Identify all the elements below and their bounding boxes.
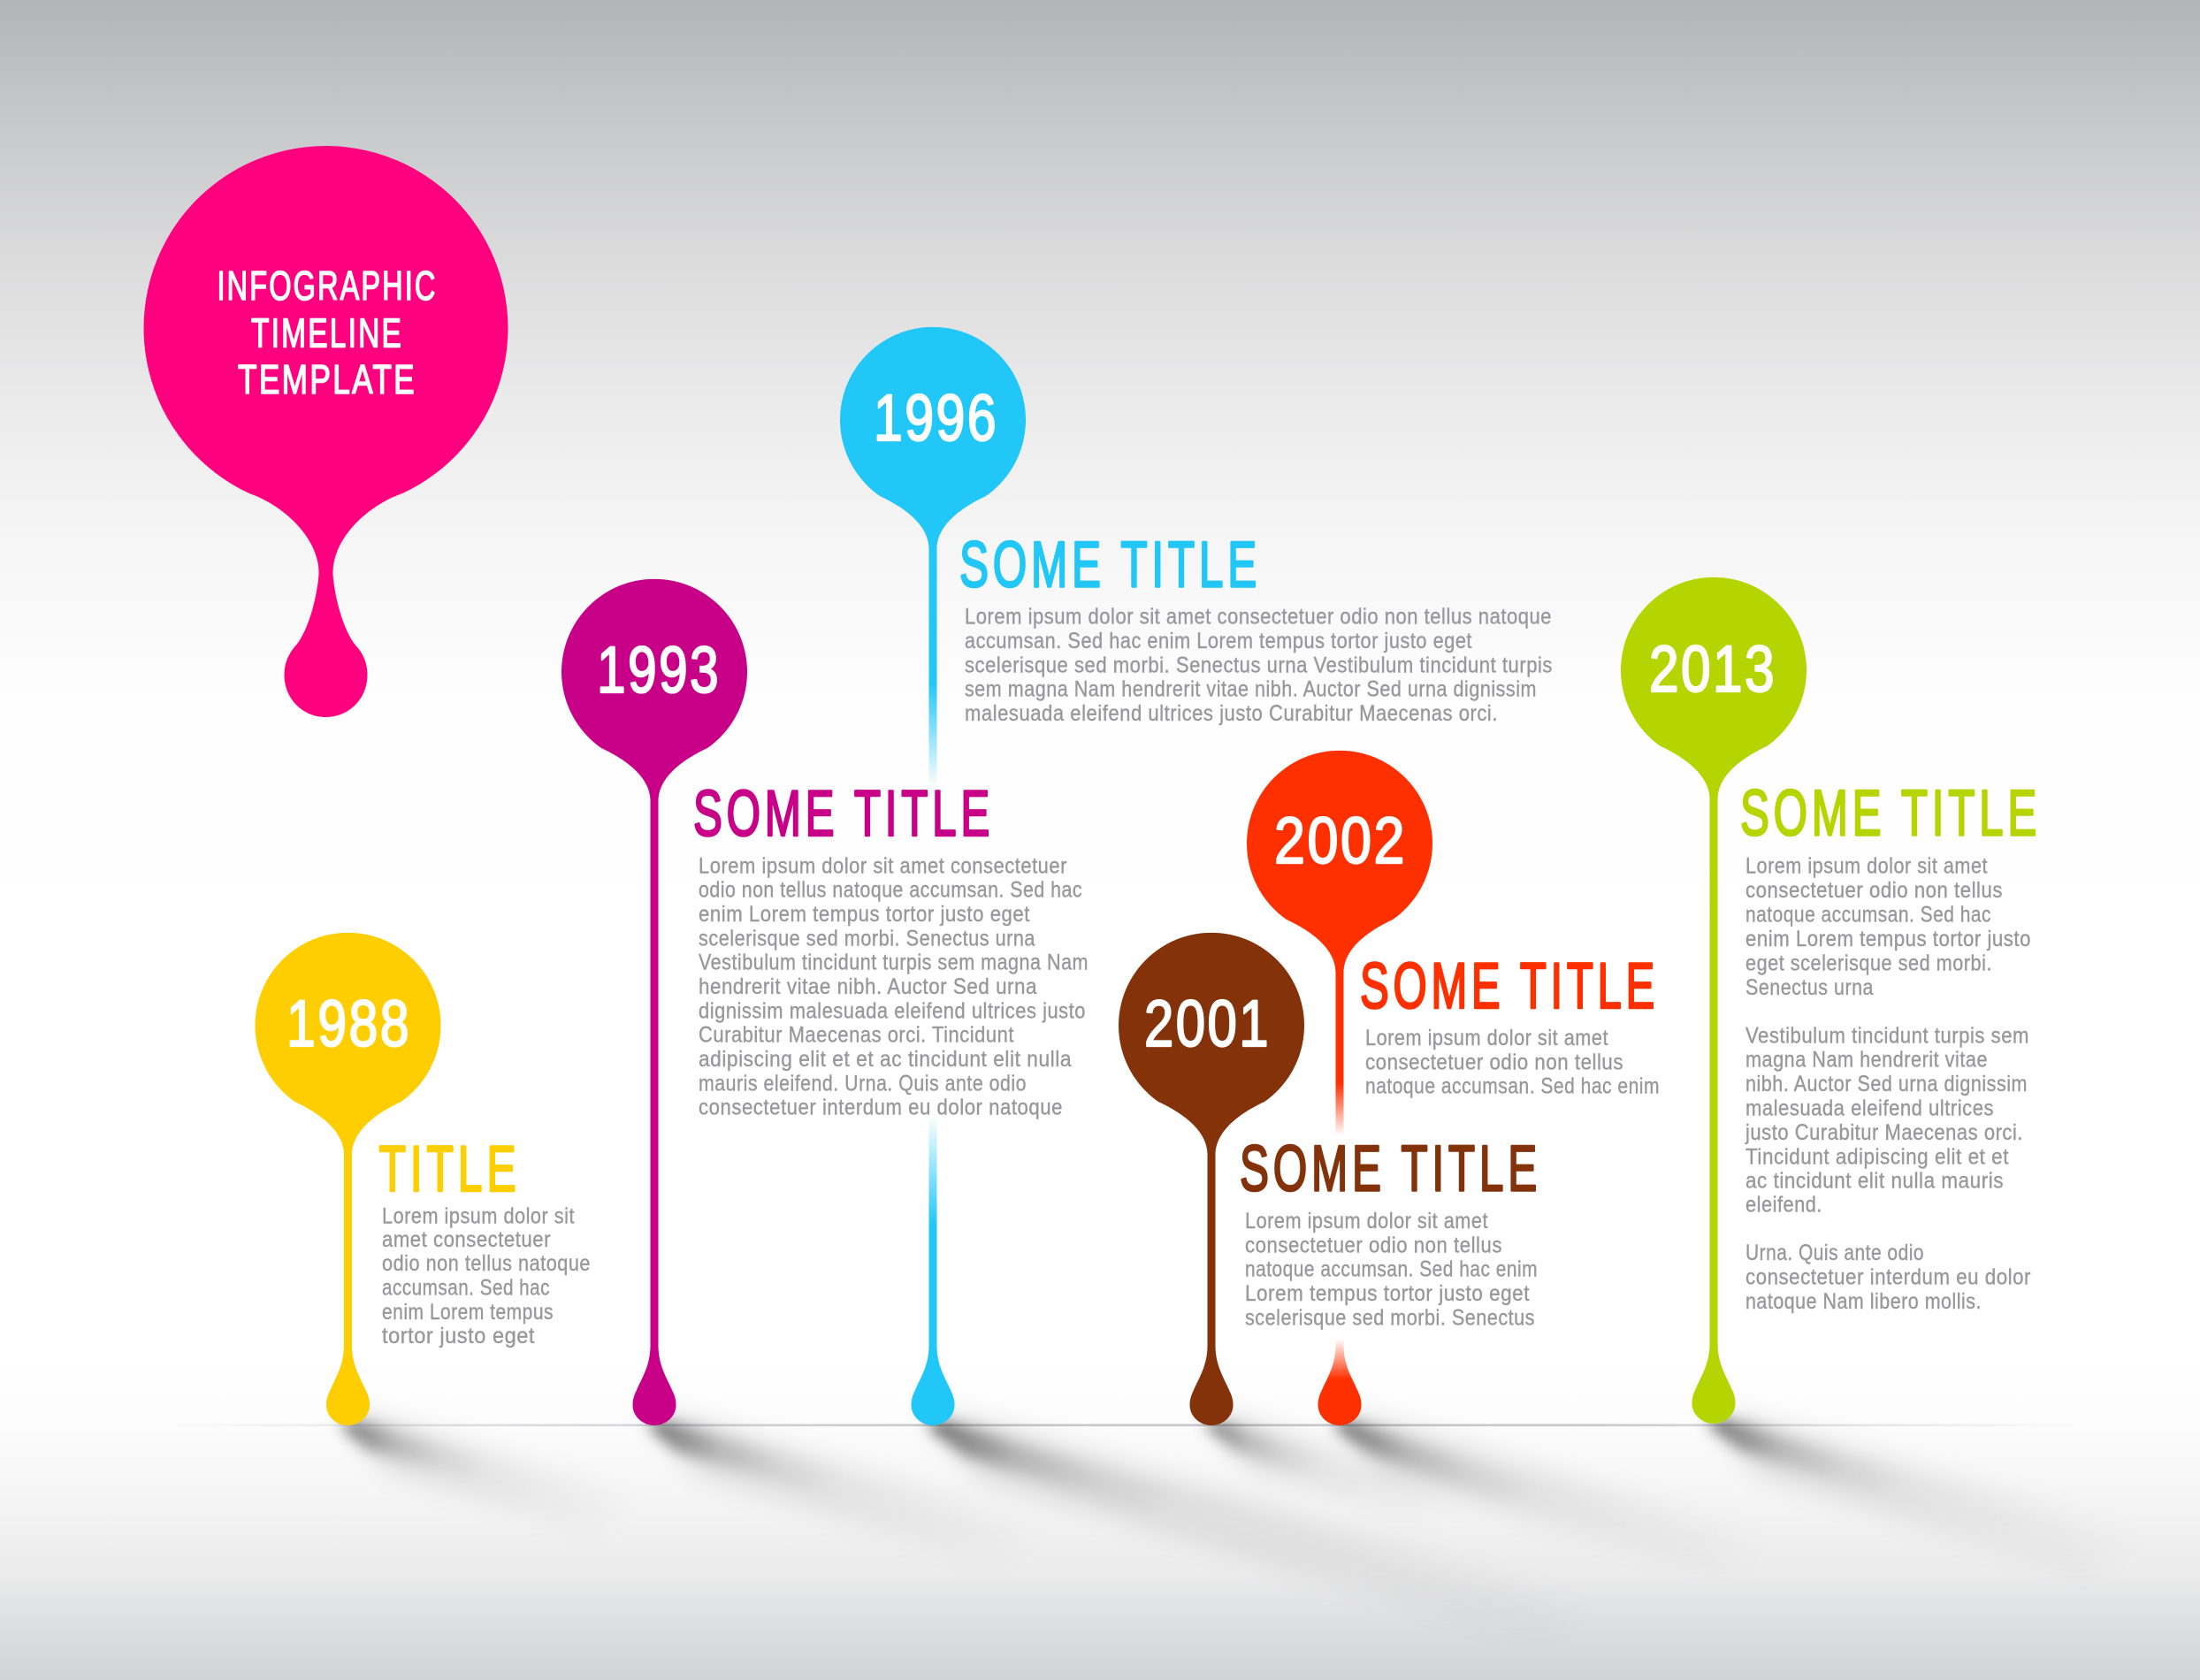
body text: eget scelerisque sed morbi. bbox=[1745, 951, 1992, 976]
body text: Lorem ipsum dolor sit amet consectetuer odio non tellus natoque bbox=[965, 605, 1552, 630]
year: 2002 bbox=[1274, 804, 1407, 877]
shadow: sharp near layer bbox=[340, 1418, 1914, 1510]
body text: enim Lorem tempus tortor justo bbox=[1745, 927, 2031, 951]
pin bbox=[561, 579, 747, 1425]
body text bbox=[1245, 1209, 1538, 1330]
heading: SOME TITLE bbox=[1240, 1134, 1541, 1204]
body text bbox=[382, 1203, 591, 1348]
pin bbox=[255, 933, 440, 1425]
shadow: soft far layer bbox=[348, 1418, 2149, 1645]
year: 1996 bbox=[874, 381, 998, 454]
heading bbox=[218, 263, 437, 402]
body text: eleifend. bbox=[1745, 1193, 1822, 1218]
body text: Vestibulum tincidunt turpis sem magna Nam bbox=[699, 951, 1089, 975]
body text: Senectus urna bbox=[1745, 975, 1874, 1000]
heading: SOME TITLE bbox=[1740, 778, 2041, 849]
body text: scelerisque sed morbi. Senectus urna Vestibulum tincidunt turpis bbox=[965, 653, 1553, 677]
body text: accumsan. Sed hac enim Lorem tempus tortor justo eget bbox=[965, 629, 1472, 653]
marker: 1993 bbox=[561, 579, 1089, 1425]
pin bbox=[1621, 577, 1807, 1424]
body text: magna Nam hendrerit vitae bbox=[1745, 1048, 1988, 1073]
baseline bbox=[168, 1424, 2078, 1426]
body text: consectetuer odio non tellus bbox=[1365, 1050, 1623, 1074]
heading: SOME TITLE bbox=[959, 529, 1261, 601]
body text bbox=[1365, 1026, 1660, 1099]
body text: hendrerit vitae nibh. Auctor Sed urna bbox=[699, 974, 1037, 999]
heading: SOME TITLE bbox=[693, 778, 994, 850]
marker: 1988 bbox=[255, 933, 591, 1425]
body text: Lorem tempus tortor justo eget bbox=[1245, 1281, 1530, 1306]
pin bbox=[1119, 933, 1304, 1425]
year: 2013 bbox=[1649, 632, 1776, 706]
body text: Lorem ipsum dolor sit amet consectetuer bbox=[699, 853, 1067, 878]
body text: Lorem ipsum dolor sit amet bbox=[1745, 854, 1988, 879]
marker: 2013 bbox=[1621, 577, 2041, 1424]
body text: sem magna Nam hendrerit vitae nibh. Auctor Sed urna dignissim bbox=[965, 677, 1537, 702]
body text: malesuada eleifend ultrices bbox=[1745, 1096, 1994, 1121]
body text: Tincidunt adipiscing elit et et bbox=[1745, 1144, 2009, 1169]
body text: Urna. Quis ante odio bbox=[1745, 1241, 1924, 1265]
bubble shape bbox=[143, 146, 508, 717]
body text: Curabitur Maecenas orci. Tincidunt bbox=[699, 1023, 1014, 1048]
body text: Lorem ipsum dolor sit amet bbox=[1245, 1209, 1488, 1233]
body text: accumsan. Sed hac bbox=[382, 1276, 550, 1301]
title bubble bbox=[143, 146, 508, 717]
heading: TIMELINE bbox=[251, 309, 403, 355]
body text: consectetuer interdum eu dolor bbox=[1745, 1265, 2031, 1290]
body text: odio non tellus natoque accumsan. Sed hac bbox=[699, 878, 1082, 903]
body text bbox=[699, 853, 1089, 1120]
heading: TEMPLATE bbox=[238, 356, 416, 402]
heading: SOME TITLE bbox=[1360, 951, 1659, 1022]
heading: INFOGRAPHIC bbox=[218, 263, 437, 309]
body text: natoque Nam libero mollis. bbox=[1745, 1289, 1982, 1314]
pin bbox=[840, 327, 1026, 1425]
body text: odio non tellus natoque bbox=[382, 1251, 591, 1276]
marker: 1996 bbox=[840, 327, 1553, 1425]
year: 1993 bbox=[597, 633, 721, 706]
body text: amet consectetuer bbox=[382, 1227, 551, 1252]
body text: enim Lorem tempus bbox=[382, 1300, 554, 1325]
body text: enim Lorem tempus tortor justo eget bbox=[699, 902, 1030, 927]
body text: mauris eleifend. Urna. Quis ante odio bbox=[699, 1071, 1027, 1096]
body text: nibh. Auctor Sed urna dignissim bbox=[1745, 1072, 2028, 1096]
body text: consectetuer interdum eu dolor natoque bbox=[699, 1096, 1063, 1120]
body text: Lorem ipsum dolor sit bbox=[382, 1203, 575, 1228]
body text bbox=[1745, 854, 2031, 1314]
body text: ac tincidunt elit nulla mauris bbox=[1745, 1168, 2004, 1193]
body text: Vestibulum tincidunt turpis sem bbox=[1745, 1023, 2029, 1048]
body text: justo Curabitur Maecenas orci. bbox=[1745, 1120, 2023, 1145]
body text: adipiscing elit et et ac tincidunt elit nulla bbox=[699, 1047, 1072, 1072]
body text: malesuada eleifend ultrices justo Curabitur Maecenas orci. bbox=[965, 701, 1498, 726]
heading: TITLE bbox=[378, 1134, 520, 1205]
body text: dignissim malesuada eleifend ultrices justo bbox=[699, 998, 1086, 1023]
body text: consectetuer odio non tellus bbox=[1745, 878, 2003, 903]
year: 1988 bbox=[286, 987, 411, 1060]
body text: Lorem ipsum dolor sit amet bbox=[1365, 1026, 1608, 1050]
marker: 2001 bbox=[1119, 933, 1541, 1425]
shadows bbox=[340, 1418, 2149, 1645]
body text: natoque accumsan. Sed hac enim bbox=[1245, 1257, 1538, 1282]
body text: tortor justo eget bbox=[382, 1324, 535, 1348]
body text: scelerisque sed morbi. Senectus bbox=[1245, 1305, 1535, 1330]
body text: consectetuer odio non tellus bbox=[1245, 1233, 1502, 1257]
pin bbox=[1247, 751, 1432, 1425]
body text: natoque accumsan. Sed hac bbox=[1745, 902, 1991, 927]
year: 2001 bbox=[1144, 987, 1271, 1060]
body text: natoque accumsan. Sed hac enim bbox=[1365, 1074, 1660, 1099]
body text: scelerisque sed morbi. Senectus urna bbox=[699, 926, 1035, 951]
marker: 2002 bbox=[1247, 751, 1660, 1425]
body text bbox=[965, 605, 1553, 726]
